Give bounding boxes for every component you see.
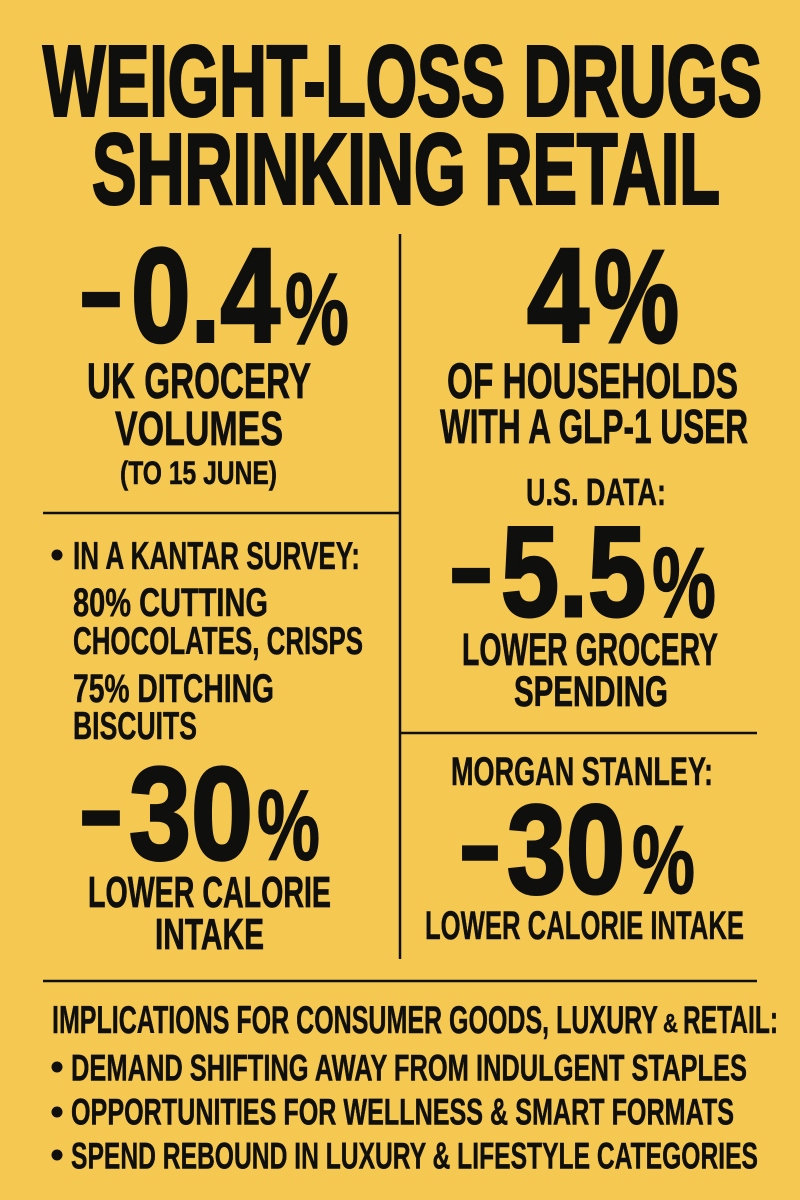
panel: Kantar survey <box>52 535 363 959</box>
label: lower grocery spending <box>462 624 718 716</box>
text block: survey findings: CHOCOLATES, CRISPS <box>73 620 363 663</box>
stat: -30%: – <box>81 742 121 876</box>
stat: -30%: 30 <box>507 779 625 920</box>
label: UK grocery volumes: VOLUMES <box>115 403 283 456</box>
stat: -0.4%: – <box>81 224 121 358</box>
label: UK grocery volumes: UK GROCERY <box>87 353 311 409</box>
stat: -5.5%: % <box>652 527 716 639</box>
label: UK grocery volumes <box>87 353 311 491</box>
stat: -5.5% <box>451 500 716 644</box>
stat: -30%: % <box>632 805 695 914</box>
text block: survey findings: 75% DITCHING <box>73 667 274 711</box>
stat: 4%: 4 <box>527 222 589 370</box>
stat: -30% <box>461 777 695 920</box>
text block: survey findings: BISCUITS <box>73 705 197 748</box>
stat: -5.5%: – <box>451 500 491 634</box>
heading: U.S. data: U.S. DATA: <box>526 472 666 514</box>
label: lower calorie intake: INTAKE <box>155 910 264 959</box>
label: UK grocery volumes: (TO 15 JUNE) <box>120 455 277 491</box>
text block: survey findings: 80% CUTTING <box>73 581 268 625</box>
stat: -5.5%: 5.5 <box>501 501 646 644</box>
stat: -30%: 30 <box>129 740 253 887</box>
stat: 4%: % <box>594 223 679 370</box>
panel: implications <box>52 999 778 1176</box>
label: lower calorie intake: LOWER CALORIE <box>88 868 331 917</box>
stat: 4% <box>527 222 679 370</box>
text block: survey findings <box>73 535 363 748</box>
title <box>43 26 762 226</box>
stat: -0.4%: 0.4 <box>131 222 280 370</box>
heading: implications: & <box>663 1008 678 1038</box>
stat: -30% <box>81 740 320 887</box>
panel: UK grocery volumes <box>81 222 349 491</box>
label: households with a GLP-1 user <box>440 353 748 454</box>
panel: Morgan Stanley <box>425 750 744 948</box>
stat: -30%: % <box>257 770 320 882</box>
label: lower grocery spending: SPENDING <box>514 668 668 716</box>
stat: -30%: – <box>461 777 499 911</box>
stat: -0.4% <box>81 222 349 370</box>
stat: -0.4%: % <box>285 252 349 366</box>
panel: GLP-1 households <box>440 222 748 454</box>
icon: bullet <box>52 550 62 560</box>
text block: survey findings: IN A KANTAR SURVEY: <box>73 535 360 578</box>
panel: U.S. data <box>451 472 718 716</box>
label: lower calorie intake <box>88 868 331 959</box>
